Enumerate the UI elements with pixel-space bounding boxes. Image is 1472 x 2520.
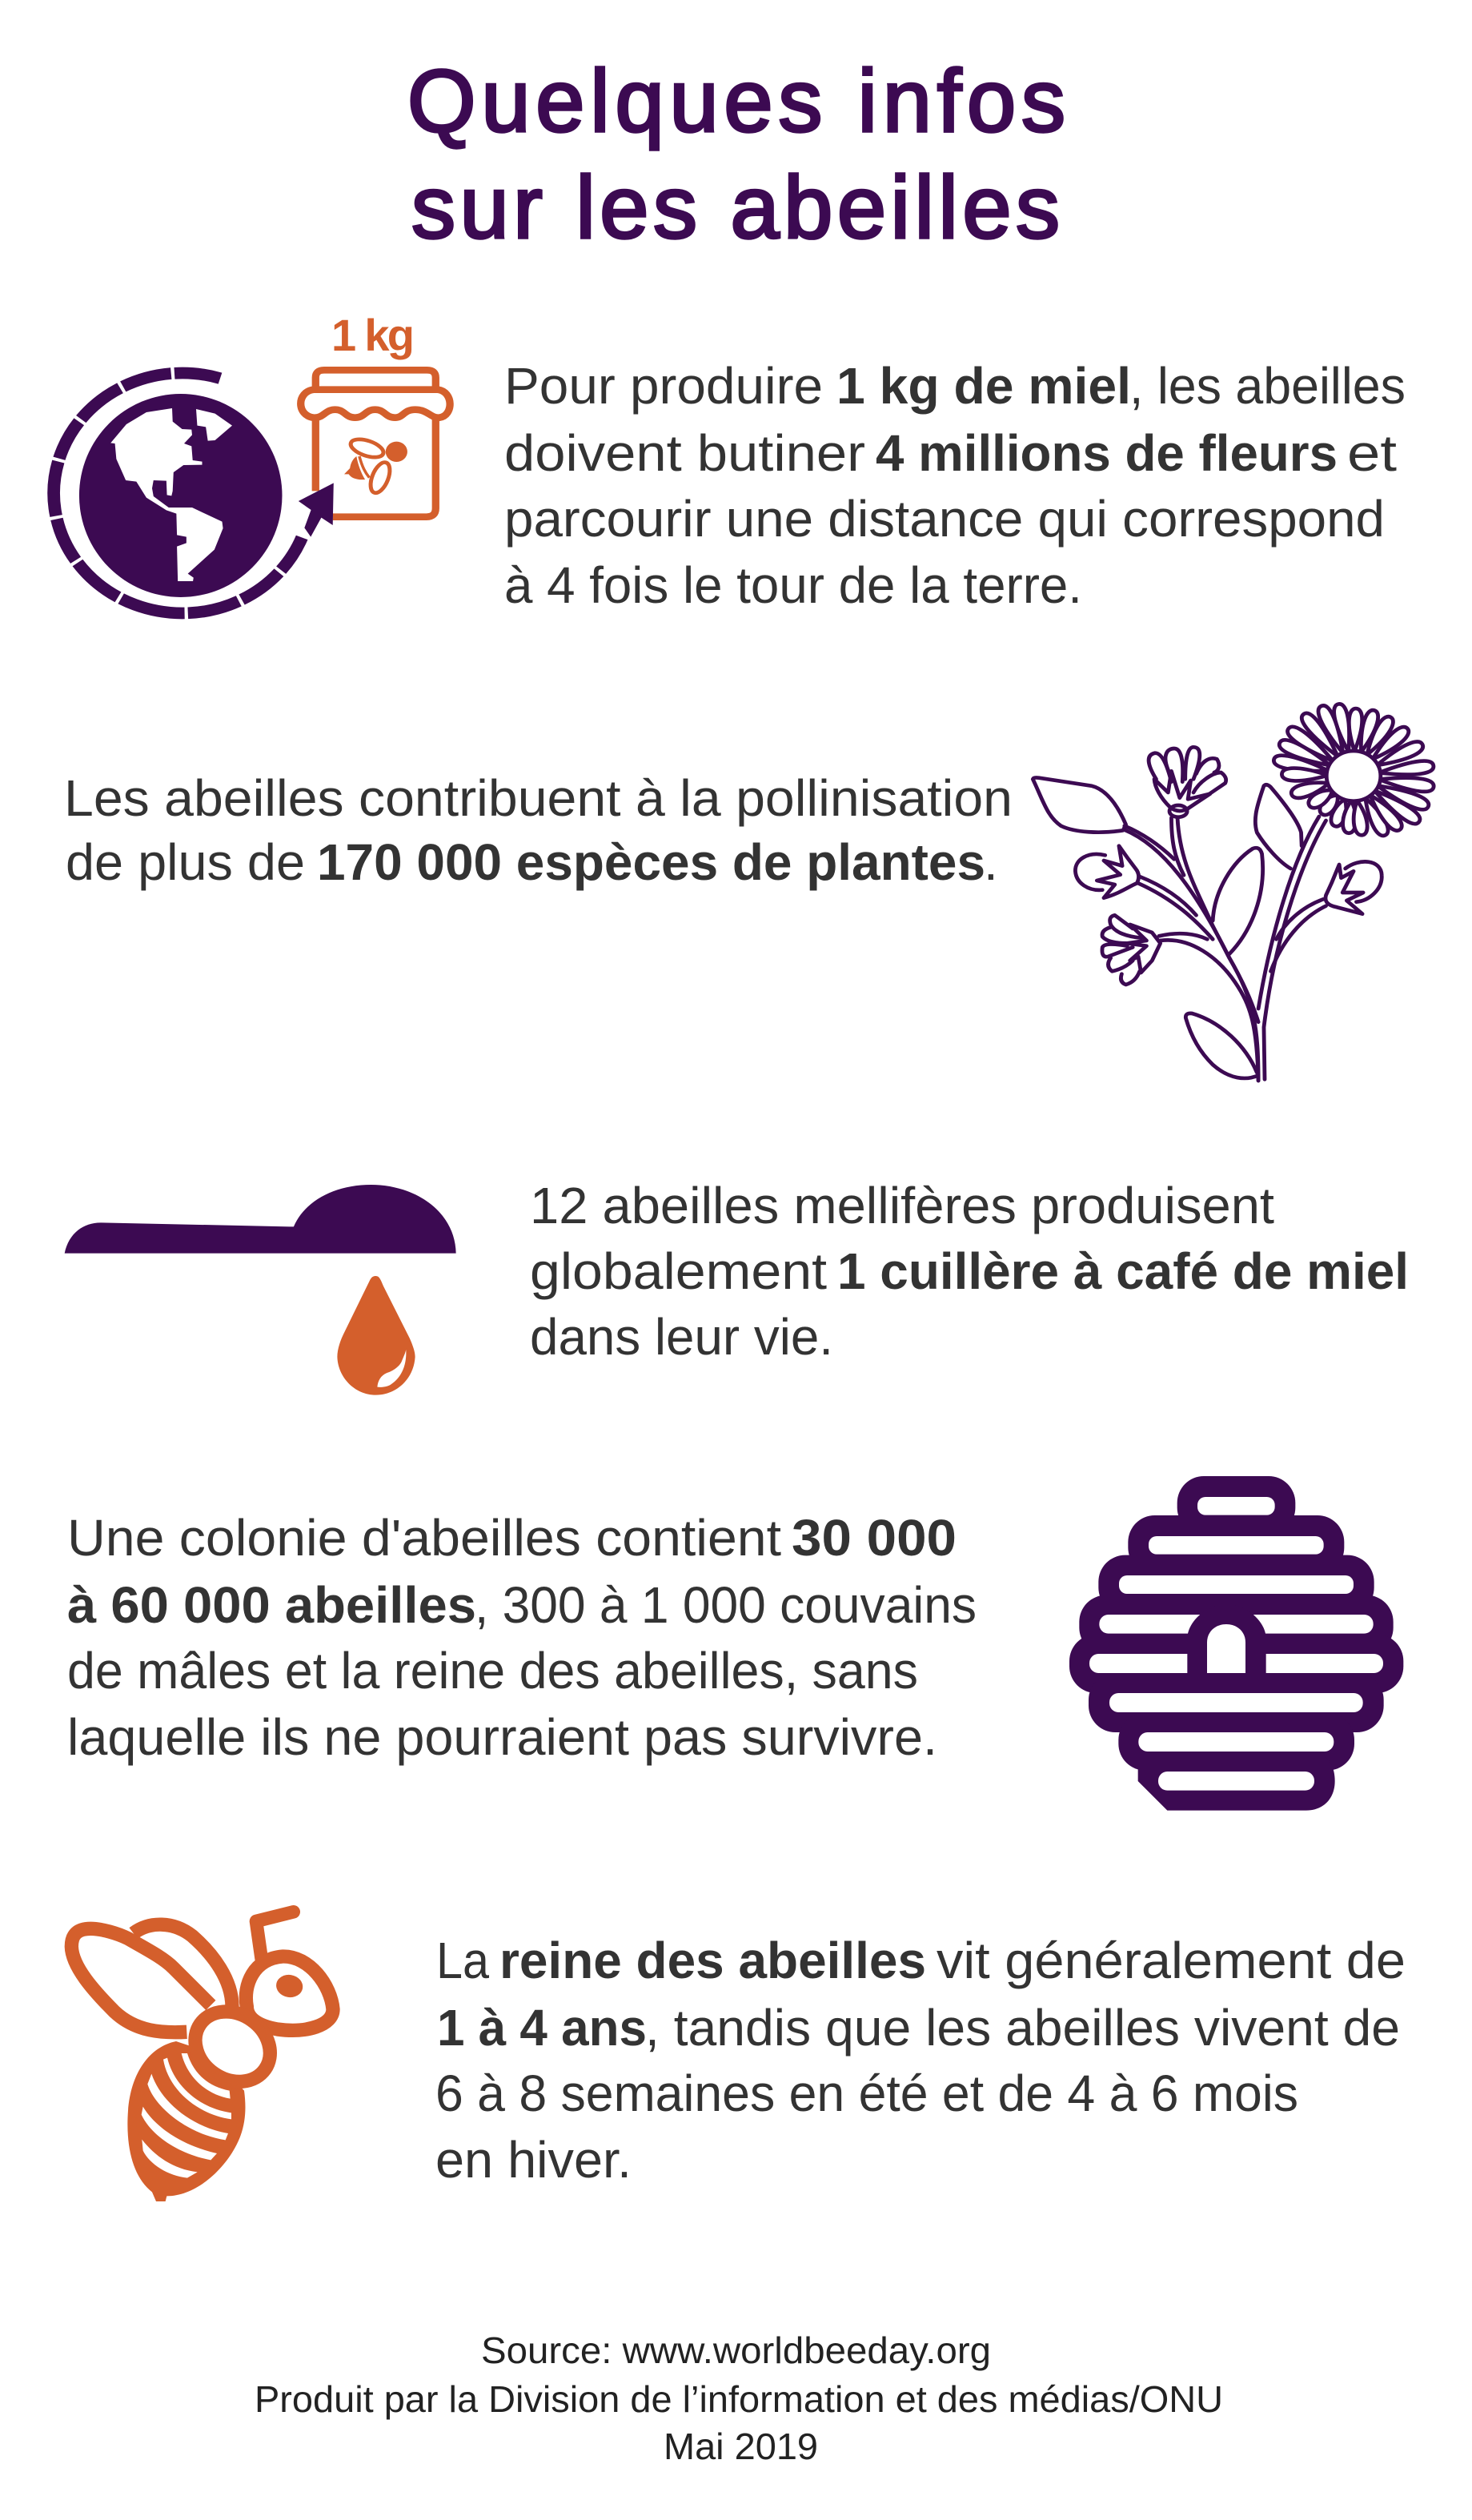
text block 1: Pour produire: [504, 357, 823, 415]
title: [407, 52, 1065, 257]
left bud: [1075, 846, 1139, 898]
text block 1: [504, 357, 1406, 614]
text block 4: Une colonie d'abeilles contient: [67, 1509, 781, 1567]
lower-left bud: [1102, 915, 1161, 985]
thorax: [182, 1997, 283, 2096]
text block 2: .: [984, 833, 998, 891]
right bud: [1326, 861, 1382, 914]
text block 5: [435, 1932, 1406, 2189]
text block 5: La: [436, 1932, 489, 1989]
title: sur les abeilles: [411, 159, 1060, 257]
daisy: [1273, 703, 1434, 838]
text block 2: [64, 769, 1013, 891]
text block 4: , 300 à 1 000 couvains: [475, 1576, 977, 1634]
globe: [79, 394, 282, 597]
text block 4: à 60 000 abeilles: [67, 1576, 476, 1634]
leaves: [1033, 777, 1302, 1078]
text block 3: 12 abeilles mellifères produisent: [530, 1177, 1274, 1234]
wings: [71, 1924, 232, 2032]
text block 3: 1 cuillère à café de miel: [837, 1242, 1409, 1300]
text block 3: [530, 1177, 1409, 1366]
head: [246, 1912, 333, 2030]
arrow: [299, 483, 334, 537]
icon: globe with arrow to honey jar: [15, 337, 450, 649]
text block 1: à 4 fois le tour de la terre.: [504, 556, 1082, 614]
icon: beehive: [1069, 1476, 1403, 1811]
source credit: Mai 2019: [664, 2426, 818, 2467]
text block 2: Les abeilles contribuent à la pollinisation: [64, 769, 1013, 827]
icon: flowers: [1033, 703, 1434, 1081]
text block 5: 6 à 8 semaines en été et de 4 à 6 mois: [435, 2065, 1298, 2122]
source credit: Source: www.worldbeeday.org: [481, 2329, 991, 2371]
text block 1: 4 millions de fleurs: [876, 424, 1338, 482]
text block 5: , tandis que les abeilles vivent de: [645, 1999, 1400, 2057]
stems: [1125, 817, 1326, 1081]
label: 1 kg: 1 kg: [331, 310, 415, 360]
text block 1: 1 kg de miel: [836, 357, 1131, 415]
text block 1: doivent butiner: [504, 424, 865, 482]
title: Quelques infos: [407, 52, 1065, 150]
top bud: [1149, 747, 1226, 817]
text block 3: dans leur vie.: [530, 1308, 833, 1366]
text block 1: , les abeilles: [1129, 357, 1406, 415]
text block 1: et: [1347, 424, 1397, 482]
text block 5: reine des abeilles: [499, 1932, 926, 1989]
text block 2: de plus de: [66, 833, 305, 891]
icon: spoon: [65, 1185, 456, 1254]
text block 2: 170 000 espèces de plantes: [317, 833, 985, 891]
text block 5: 1 à 4 ans: [437, 1999, 647, 2057]
dashed orbit: [15, 337, 350, 649]
text block 4: 30 000: [792, 1509, 957, 1567]
text block 4: laquelle ils ne pourraient pas survivre.: [67, 1708, 937, 1766]
text block 4: de mâles et la reine des abeilles, sans: [67, 1642, 918, 1699]
text block 3: globalement: [530, 1242, 827, 1300]
jar: [301, 370, 450, 517]
abdomen: [127, 2041, 245, 2201]
text block 5: vit généralement de: [937, 1932, 1406, 1989]
source credit: [255, 2329, 1223, 2467]
text block 5: en hiver.: [435, 2131, 632, 2189]
text block 1: parcourir une distance qui correspond: [504, 490, 1385, 548]
source credit: Produit par la Division de l’information et des médias/ONU: [255, 2378, 1223, 2420]
text block 4: [67, 1509, 977, 1766]
icon: honey drop: [337, 1276, 415, 1395]
icon: bee: [71, 1912, 333, 2201]
